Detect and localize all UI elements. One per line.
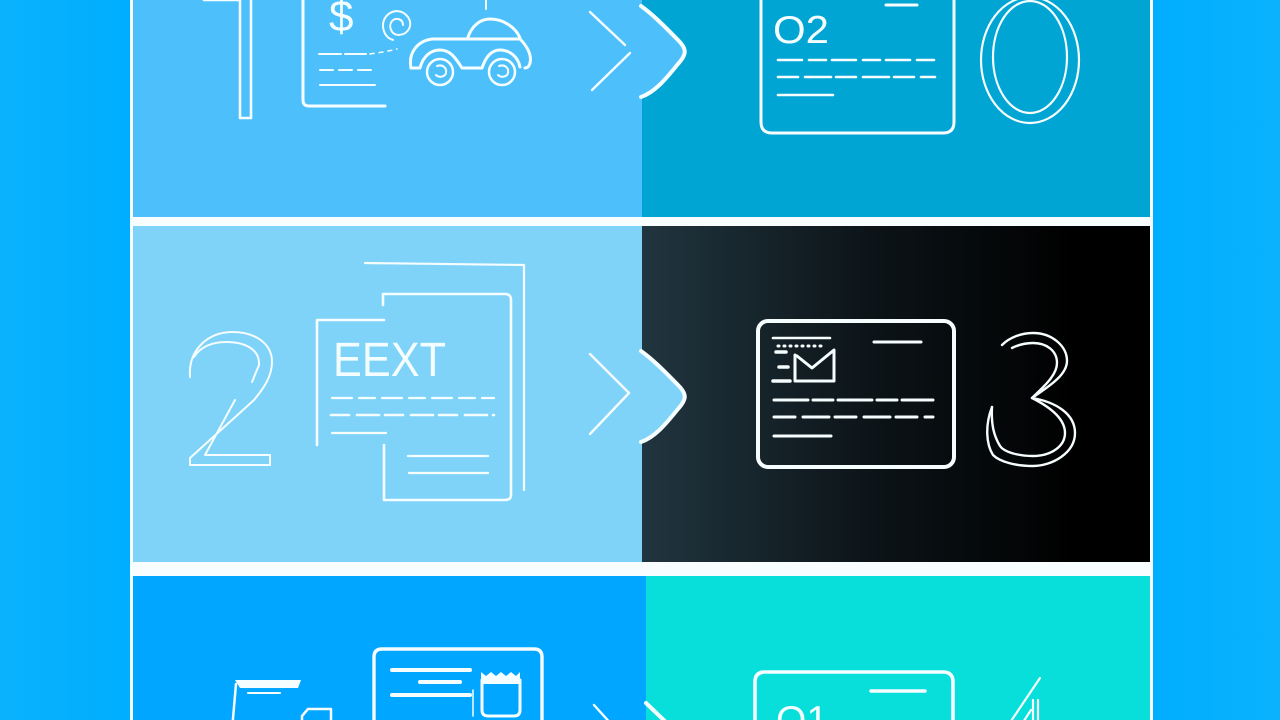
icon: stacked documents	[317, 263, 524, 500]
icon: stacked documents: EEXT	[333, 334, 446, 387]
numeral 5	[232, 680, 331, 720]
white frame	[130, 0, 1153, 720]
icon: invoice with dollar sign	[303, 0, 410, 106]
panel: step 0	[642, 0, 1150, 217]
panel: step 5	[133, 576, 646, 720]
icon: car	[410, 0, 530, 85]
numeral 3	[987, 333, 1075, 466]
numeral 4	[1005, 678, 1040, 720]
panel: step 3	[642, 226, 1150, 562]
icon: large chevron step 5 to 4	[646, 703, 672, 720]
numeral 2	[190, 332, 272, 465]
icon: mail card	[758, 321, 954, 467]
icon: thin chevron	[594, 705, 613, 720]
icon: document with notepad	[374, 649, 542, 720]
panel: step 2	[133, 226, 642, 562]
icon: thin chevron	[590, 12, 630, 90]
icon: document card O2	[761, 0, 954, 133]
icon: document card O2: O2	[773, 9, 829, 52]
panel: step 1	[133, 0, 642, 217]
numeral 0	[981, 0, 1079, 123]
icon: large chevron step 2 to 3	[640, 350, 685, 442]
icon: large chevron step 1 to 0	[640, 5, 685, 97]
icon: thin chevron	[590, 354, 629, 434]
right frame strip	[1150, 0, 1153, 720]
numeral 1	[204, 0, 251, 118]
icon: document card 01	[755, 672, 953, 720]
panel: step 4	[646, 576, 1150, 720]
